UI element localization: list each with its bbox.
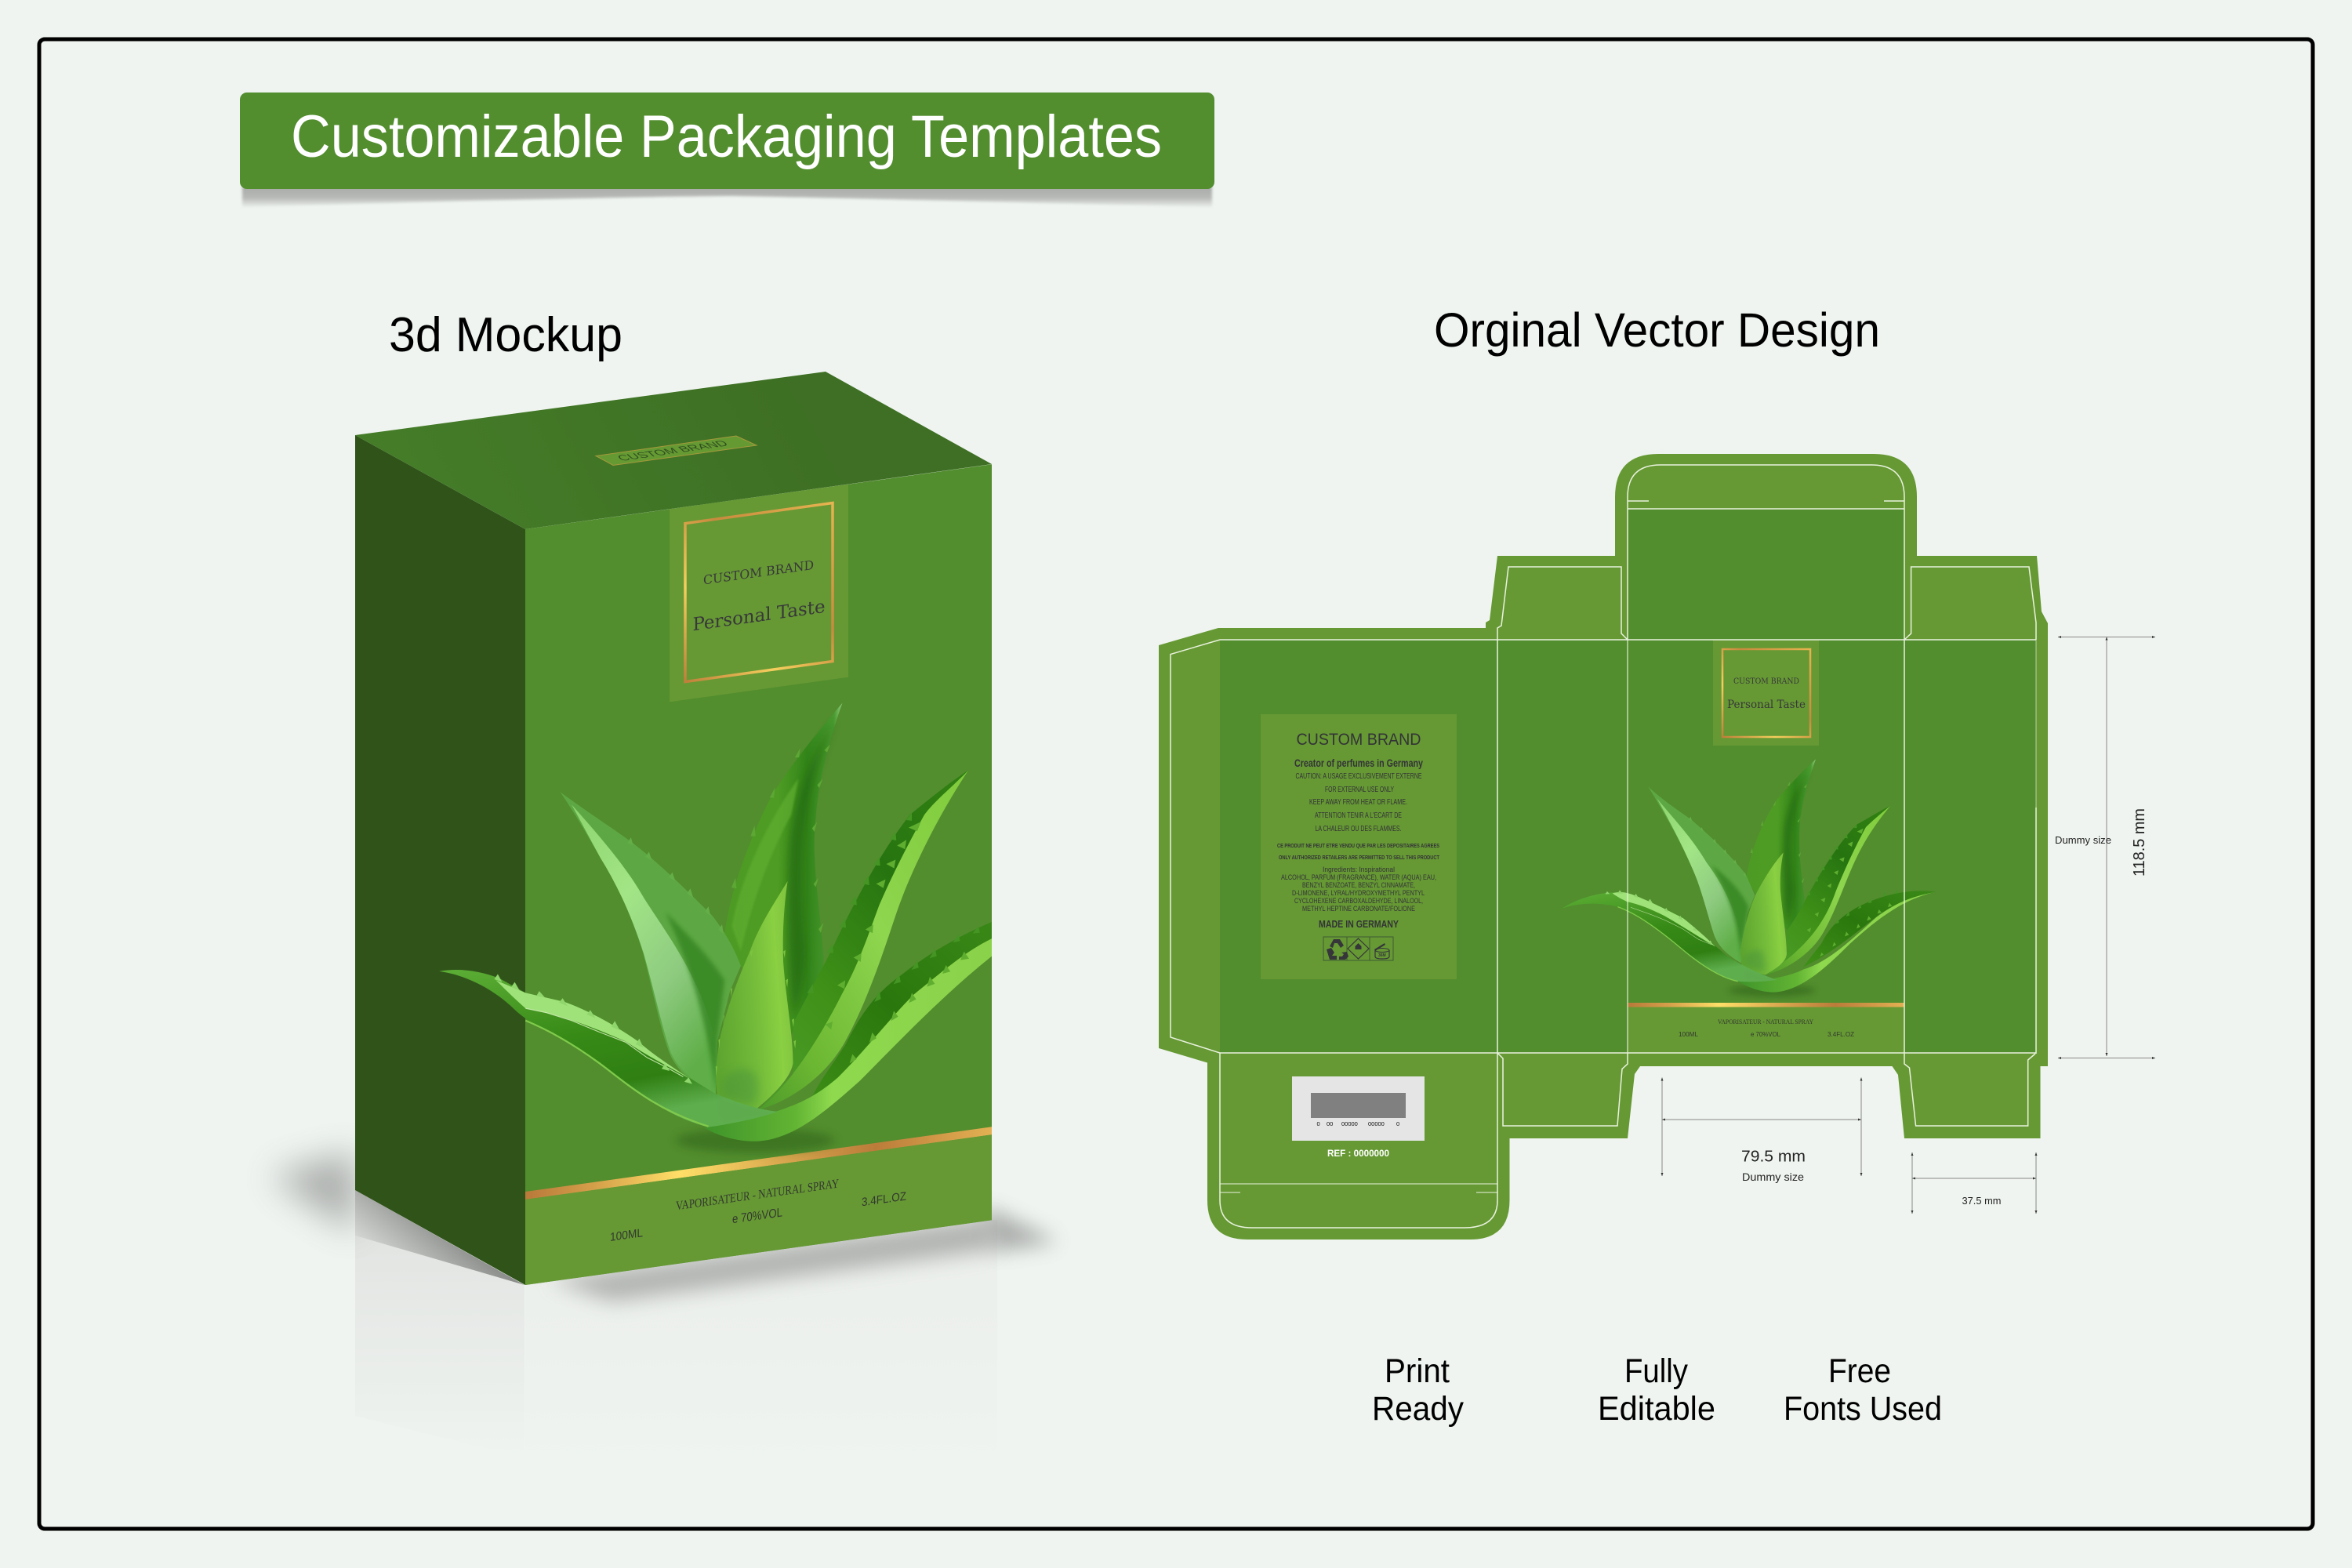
back panel label: CUSTOM BRAND — [1297, 731, 1421, 749]
back panel label: CYCLOHEXENE CARBOXALDEHYDE, LINALOOL, — [1294, 897, 1423, 906]
front label panel: CUSTOM BRAND — [703, 557, 814, 587]
back panel label: Creator of perfumes in Germany — [1294, 757, 1423, 769]
back panel label: FOR EXTERNAL USE ONLY — [1325, 786, 1394, 794]
back panel label: MADE IN GERMANY — [1319, 918, 1399, 930]
front label panel: Personal Taste — [693, 597, 826, 635]
back panel label: CE PRODUIT NE PEUT ETRE VENDU QUE PAR LES DEPOSITAIRES AGREES — [1277, 844, 1439, 849]
dieline fold lines — [1171, 465, 2036, 1228]
leaf: left big — [1648, 786, 1755, 963]
barcode block: 0 — [1396, 1120, 1399, 1127]
barcode block: REF : 0000000 — [1327, 1148, 1389, 1159]
aloe vera plant on dieline — [1562, 759, 1936, 996]
heading: 3d Mockup: 3d Mockup — [389, 308, 622, 362]
front label panel — [670, 485, 848, 702]
back panel label: LA CHALEUR OU DES FLAMMES. — [1316, 825, 1402, 833]
leaf: right tall — [759, 771, 968, 1110]
dimension: 118.5 mm: 118.5 mm — [2130, 808, 2148, 877]
feature: Print Ready: Print — [1385, 1352, 1450, 1390]
feature: Fully Editable: Fully — [1624, 1352, 1688, 1390]
leaf: long left — [1562, 890, 1777, 982]
dieline front band: VAPORISATEUR - NATURAL SPRAY — [1718, 1018, 1813, 1025]
back panel label: BENZYL BENZOATE, BENZYL CINNAMATE, — [1302, 881, 1415, 890]
dieline front band — [1628, 1003, 1904, 1038]
leaf: back center — [724, 703, 842, 1034]
dimension: 79.5 mm: 79.5 mm — [1741, 1148, 1806, 1165]
icons: recycle, flammable, period after opening: 36M — [1378, 953, 1386, 958]
leaf: right tall — [1766, 805, 1891, 975]
back panel label: D-LIMONENE, LYRAL/HYDROXYMETHYL PENTYL — [1292, 889, 1425, 898]
dieline front label: Personal Taste — [1727, 699, 1806, 711]
back panel label: ONLY AUTHORIZED RETAILERS ARE PERMITTED TO SELL THIS PRODUCT — [1279, 855, 1440, 861]
back panel label: ATTENTION TENIR A L'ECART DE — [1315, 811, 1402, 820]
feature: Fully Editable — [1598, 1352, 1715, 1428]
dimension: 79.5 mm: Dummy size — [1742, 1171, 1804, 1183]
feature: Free Fonts Used: Fonts Used — [1784, 1390, 1942, 1428]
floor reflection and shadows — [270, 1152, 1058, 1474]
box top label: CUSTOM BRAND — [615, 439, 731, 463]
dieline front label: CUSTOM BRAND — [1733, 677, 1799, 686]
back panel label: KEEP AWAY FROM HEAT OR FLAME. — [1309, 798, 1407, 807]
title banner: Customizable Packaging Templates — [291, 103, 1162, 170]
dimension: 118.5 mm: Dummy size — [2055, 834, 2111, 846]
dimension: 37.5 mm — [1911, 1152, 2037, 1214]
front bottom band: VAPORISATEUR - NATURAL SPRAY — [676, 1177, 839, 1213]
barcode block: 00 — [1327, 1120, 1333, 1127]
dieline front label — [1713, 640, 1819, 746]
dimension: 118.5 mm — [2055, 636, 2155, 1059]
feature: Print Ready: Ready — [1372, 1390, 1464, 1428]
back panel label — [1261, 714, 1457, 979]
back panel label: ALCOHOL, PARFUM (FRAGRANCE), WATER (AQUA) EAU, — [1281, 873, 1436, 882]
box top face — [355, 372, 992, 529]
feature: Fully Editable: Editable — [1598, 1390, 1715, 1428]
feature: Print Ready — [1372, 1352, 1464, 1428]
barcode block: 00000 — [1368, 1120, 1385, 1127]
leaf: front center — [1740, 852, 1787, 975]
feature: Free Fonts Used: Free — [1828, 1352, 1891, 1390]
dimension: 79.5 mm — [1661, 1077, 1863, 1183]
leaf: long left — [439, 970, 779, 1127]
feature: Free Fonts Used — [1784, 1352, 1942, 1428]
heading: Orginal Vector Design: Orginal Vector Design — [1434, 303, 1880, 357]
front bottom band — [525, 1127, 992, 1285]
aloe vera plant on box — [439, 703, 1007, 1152]
box side face — [355, 435, 525, 1285]
barcode block: 00000 — [1341, 1120, 1358, 1127]
barcode block: 0 — [1317, 1120, 1320, 1127]
dieline front band: e 70%VOL — [1751, 1030, 1780, 1038]
dimension: 37.5 mm: 37.5 mm — [1962, 1196, 2001, 1207]
barcode block — [1292, 1076, 1425, 1159]
icons: recycle, flammable, period after opening — [1323, 937, 1393, 960]
title banner — [240, 93, 1214, 207]
leaf: far right — [1738, 890, 1936, 993]
leaf: left big — [560, 792, 741, 1095]
back panel label: Ingredients: Inspirational — [1323, 866, 1395, 874]
front bottom band: e 70%VOL — [732, 1205, 782, 1226]
front bottom band: 3.4FL.OZ — [862, 1190, 906, 1209]
leaf: back center — [1746, 759, 1816, 931]
dieline front band: 3.4FL.OZ — [1828, 1030, 1854, 1038]
box front face — [525, 464, 992, 1285]
back panel label: CAUTION: A USAGE EXCLUSIVEMENT EXTERNE — [1295, 772, 1422, 781]
leaf: front center — [716, 881, 796, 1110]
leaf: far right — [705, 916, 1007, 1142]
back panel label: METHYL HEPTINE CARBONATE/FOLIONE — [1302, 905, 1415, 913]
dieline front band: 100ML — [1679, 1030, 1698, 1038]
3d box mockup — [269, 372, 1057, 1347]
dieline printed panels — [1220, 509, 2036, 1053]
dieline template — [1159, 454, 2048, 1240]
front bottom band: 100ML — [610, 1226, 643, 1244]
dieline outer shape — [1159, 454, 2048, 1240]
